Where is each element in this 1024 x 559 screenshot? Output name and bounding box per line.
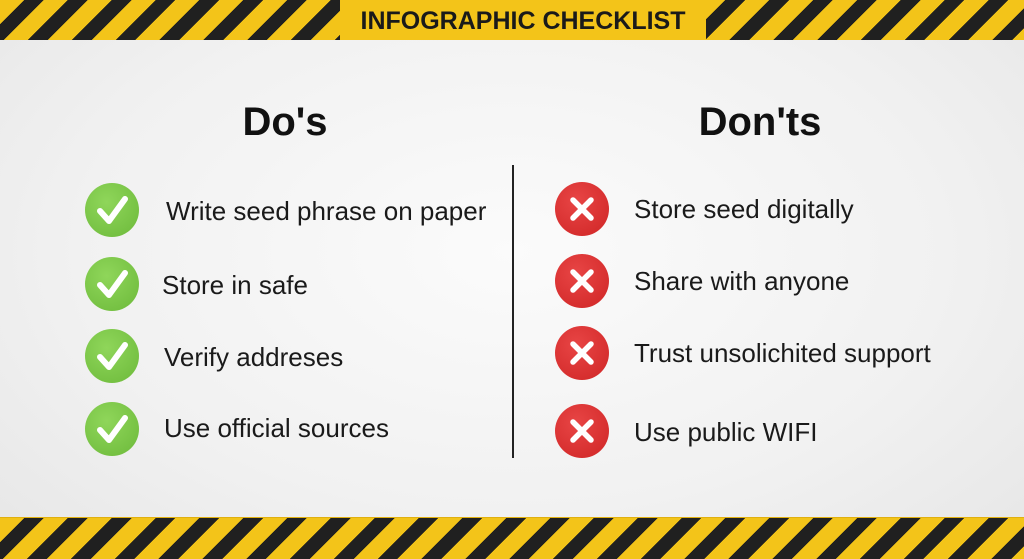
- dont item 4: Use public WIFI: [634, 417, 818, 447]
- panel: do's: [85, 183, 486, 456]
- dont item 2: Share with anyone: [634, 266, 849, 296]
- bottom hazard band: [0, 517, 1024, 559]
- top hazard band: [0, 0, 1024, 40]
- title: [340, 0, 706, 40]
- dont item 1: Store seed digitally: [634, 194, 854, 224]
- do item 4: Use official sources: [164, 413, 389, 443]
- dont item 3: Trust unsolichited support: [634, 338, 931, 368]
- dont item 2: [555, 254, 849, 308]
- heading: Do's: Do's: [242, 100, 328, 144]
- do item 1: [85, 183, 486, 237]
- do item 4: [85, 402, 389, 456]
- title: INFOGRAPHIC CHECKLIST: [360, 7, 686, 35]
- do item 2: Store in safe: [162, 270, 308, 300]
- do item 1: Write seed phrase on paper: [166, 196, 486, 226]
- dont item 4: [555, 404, 818, 458]
- dont item 1: [555, 182, 854, 236]
- do item 3: [85, 329, 343, 383]
- do item 3: Verify addreses: [164, 342, 343, 372]
- do item 2: [85, 257, 308, 311]
- dont item 3: [555, 326, 931, 380]
- heading: Don'ts: Don'ts: [699, 100, 821, 144]
- divider: [512, 165, 514, 458]
- panel: don'ts: [555, 182, 931, 458]
